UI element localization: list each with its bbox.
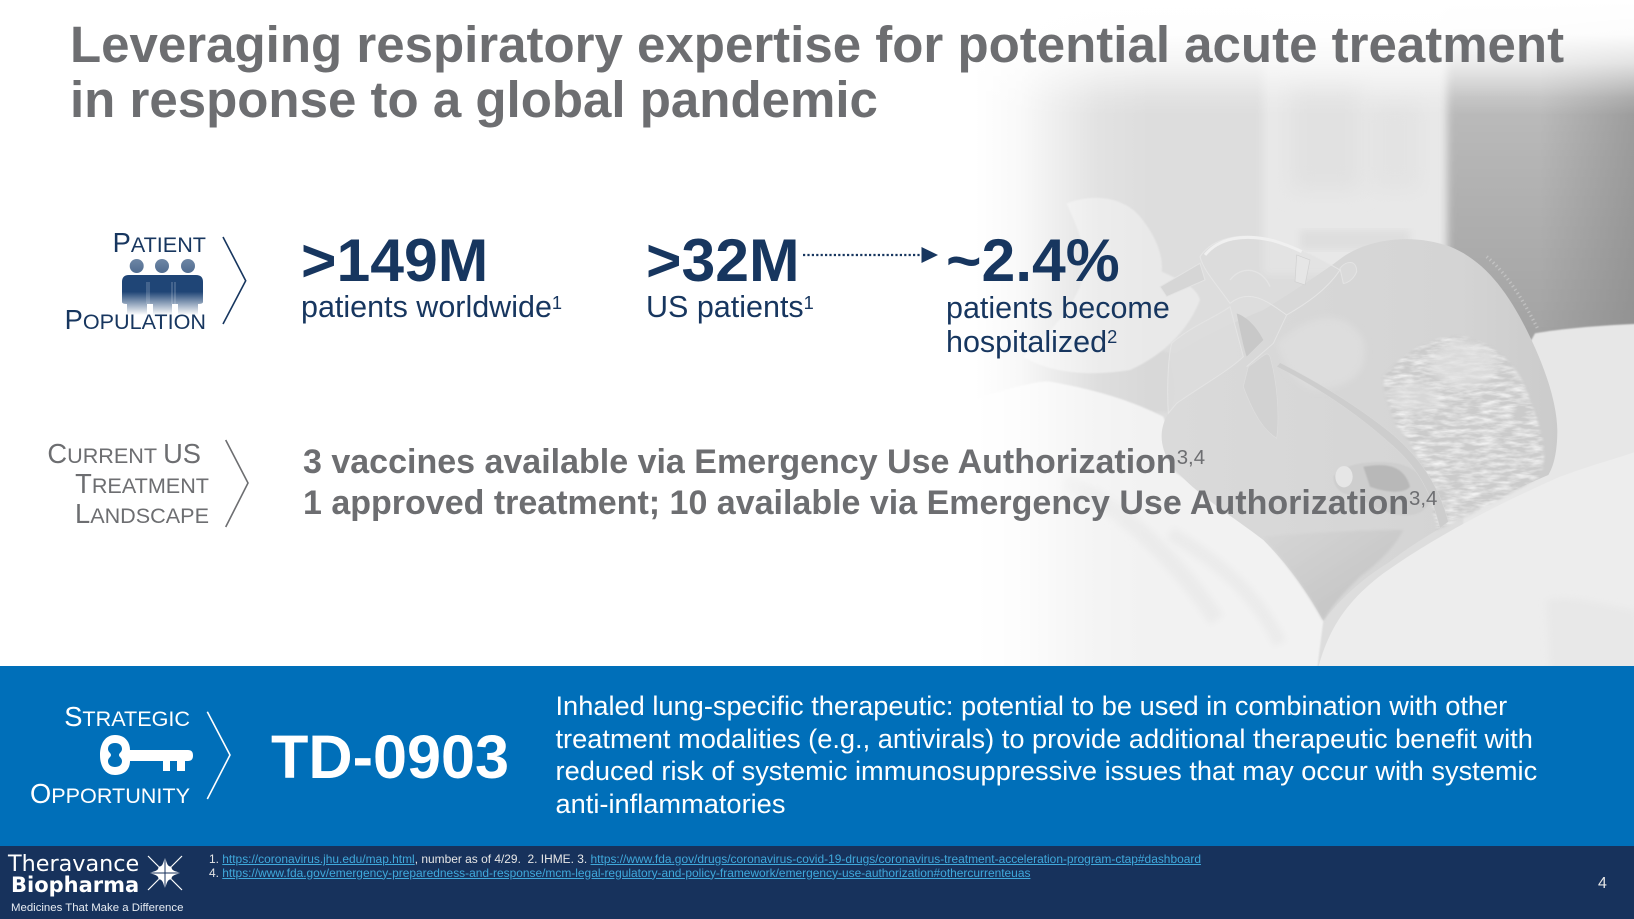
stat: hospitalized: patients become — [946, 291, 1170, 325]
oxygen mask — [1160, 236, 1357, 413]
title — [70, 16, 1564, 128]
label: strategic: STRATEGIC — [64, 701, 190, 732]
footnotes: 1. https://coronavirus.jhu.edu/map.html, number as of 4/29. 2. IHME. 3. https://www.fda.gov/drugs/coronavirus-covid-19-drugs/coronavirus-treatment-acceleration-program-ctap#dashboard — [209, 852, 1201, 866]
logo: Theravance Biopharma: Biopharma — [11, 873, 139, 897]
stat: worldwide patients: patients worldwide1 — [301, 290, 562, 324]
description: treatment modalities (e.g., antivirals) to provide additional therapeutic benefit with — [556, 722, 1533, 754]
hair fringe at top of head — [1487, 257, 1538, 330]
dotted arrow — [803, 247, 938, 263]
logo: Theravance Biopharma: Medicines That Make a Difference — [11, 902, 183, 914]
label: current US treatment landscape: LANDSCAPE — [75, 498, 209, 529]
label: population: POPULATION — [65, 304, 206, 335]
hand holding mask — [1023, 198, 1200, 373]
product name: TD-0903 — [271, 723, 509, 791]
section: current US treatment landscape — [47, 438, 1437, 529]
icon: key — [100, 735, 193, 775]
stat: hospitalized: ~2.4% — [946, 226, 1120, 294]
footnotes: 4. https://www.fda.gov/emergency-preparedness-and-response/mcm-legal-regulatory-and-policy-framework/emergency-use-authorization#othercurrenteuas — [209, 866, 1030, 880]
stat: US patients: >32M — [646, 226, 800, 294]
description: anti-inflammatories — [556, 788, 785, 818]
stat: US patients — [646, 226, 814, 324]
stat: US patients: US patients1 — [646, 290, 814, 324]
footnotes — [209, 852, 1201, 880]
background photo: patient with oxygen mask — [1024, 40, 1634, 666]
description — [556, 690, 1537, 818]
ear — [1333, 462, 1430, 515]
logo: Theravance Biopharma: Theravance — [8, 851, 139, 877]
stat: hospitalized: hospitalized2 — [946, 324, 1117, 358]
front pillow — [1317, 447, 1634, 673]
section: patient population — [65, 226, 1170, 358]
label: current US treatment landscape — [47, 438, 209, 529]
stat: worldwide patients: >149M — [301, 226, 488, 294]
room background — [975, 0, 1634, 666]
title: Leveraging respiratory expertise for potential acute treatment — [70, 16, 1564, 73]
chevron — [206, 711, 231, 800]
label: current US treatment landscape: CURRENT US — [47, 438, 201, 469]
icon: group of people — [122, 259, 203, 314]
label: opportunity: OPPORTUNITY — [30, 778, 190, 809]
treatment text: 3 vaccines available via Emergency Use Authorization3,4 — [303, 443, 1205, 481]
treatment text: 1 approved treatment; 10 available via Emergency Use Authorization3,4 — [303, 484, 1437, 522]
elastic strap and cheek pad — [1243, 354, 1448, 528]
head — [1162, 239, 1557, 621]
description: Inhaled lung-specific therapeutic: potential to be used in combination with other — [556, 690, 1507, 721]
arm behind mask — [980, 341, 1197, 413]
pillow behind head — [1463, 323, 1634, 673]
chevron — [222, 236, 247, 324]
label: patient: PATIENT — [113, 227, 206, 258]
title: in response to a global pandemic — [70, 71, 878, 128]
icon: star mark — [148, 856, 182, 890]
page number: 4 — [1598, 875, 1607, 892]
hair — [1384, 338, 1544, 528]
shirt and bedding — [943, 381, 1323, 673]
treatment text — [303, 443, 1437, 522]
stat: worldwide patients — [301, 226, 562, 324]
panel: strategic opportunity band — [0, 666, 1634, 846]
footer bar — [0, 846, 1634, 919]
description: reduced risk of systemic immunosuppressive issues that may occur with systemic — [556, 755, 1537, 786]
stat: hospitalized — [946, 226, 1170, 358]
logo: Theravance Biopharma — [8, 851, 183, 914]
chevron — [225, 440, 249, 528]
label: current US treatment landscape: TREATMENT — [75, 468, 209, 499]
